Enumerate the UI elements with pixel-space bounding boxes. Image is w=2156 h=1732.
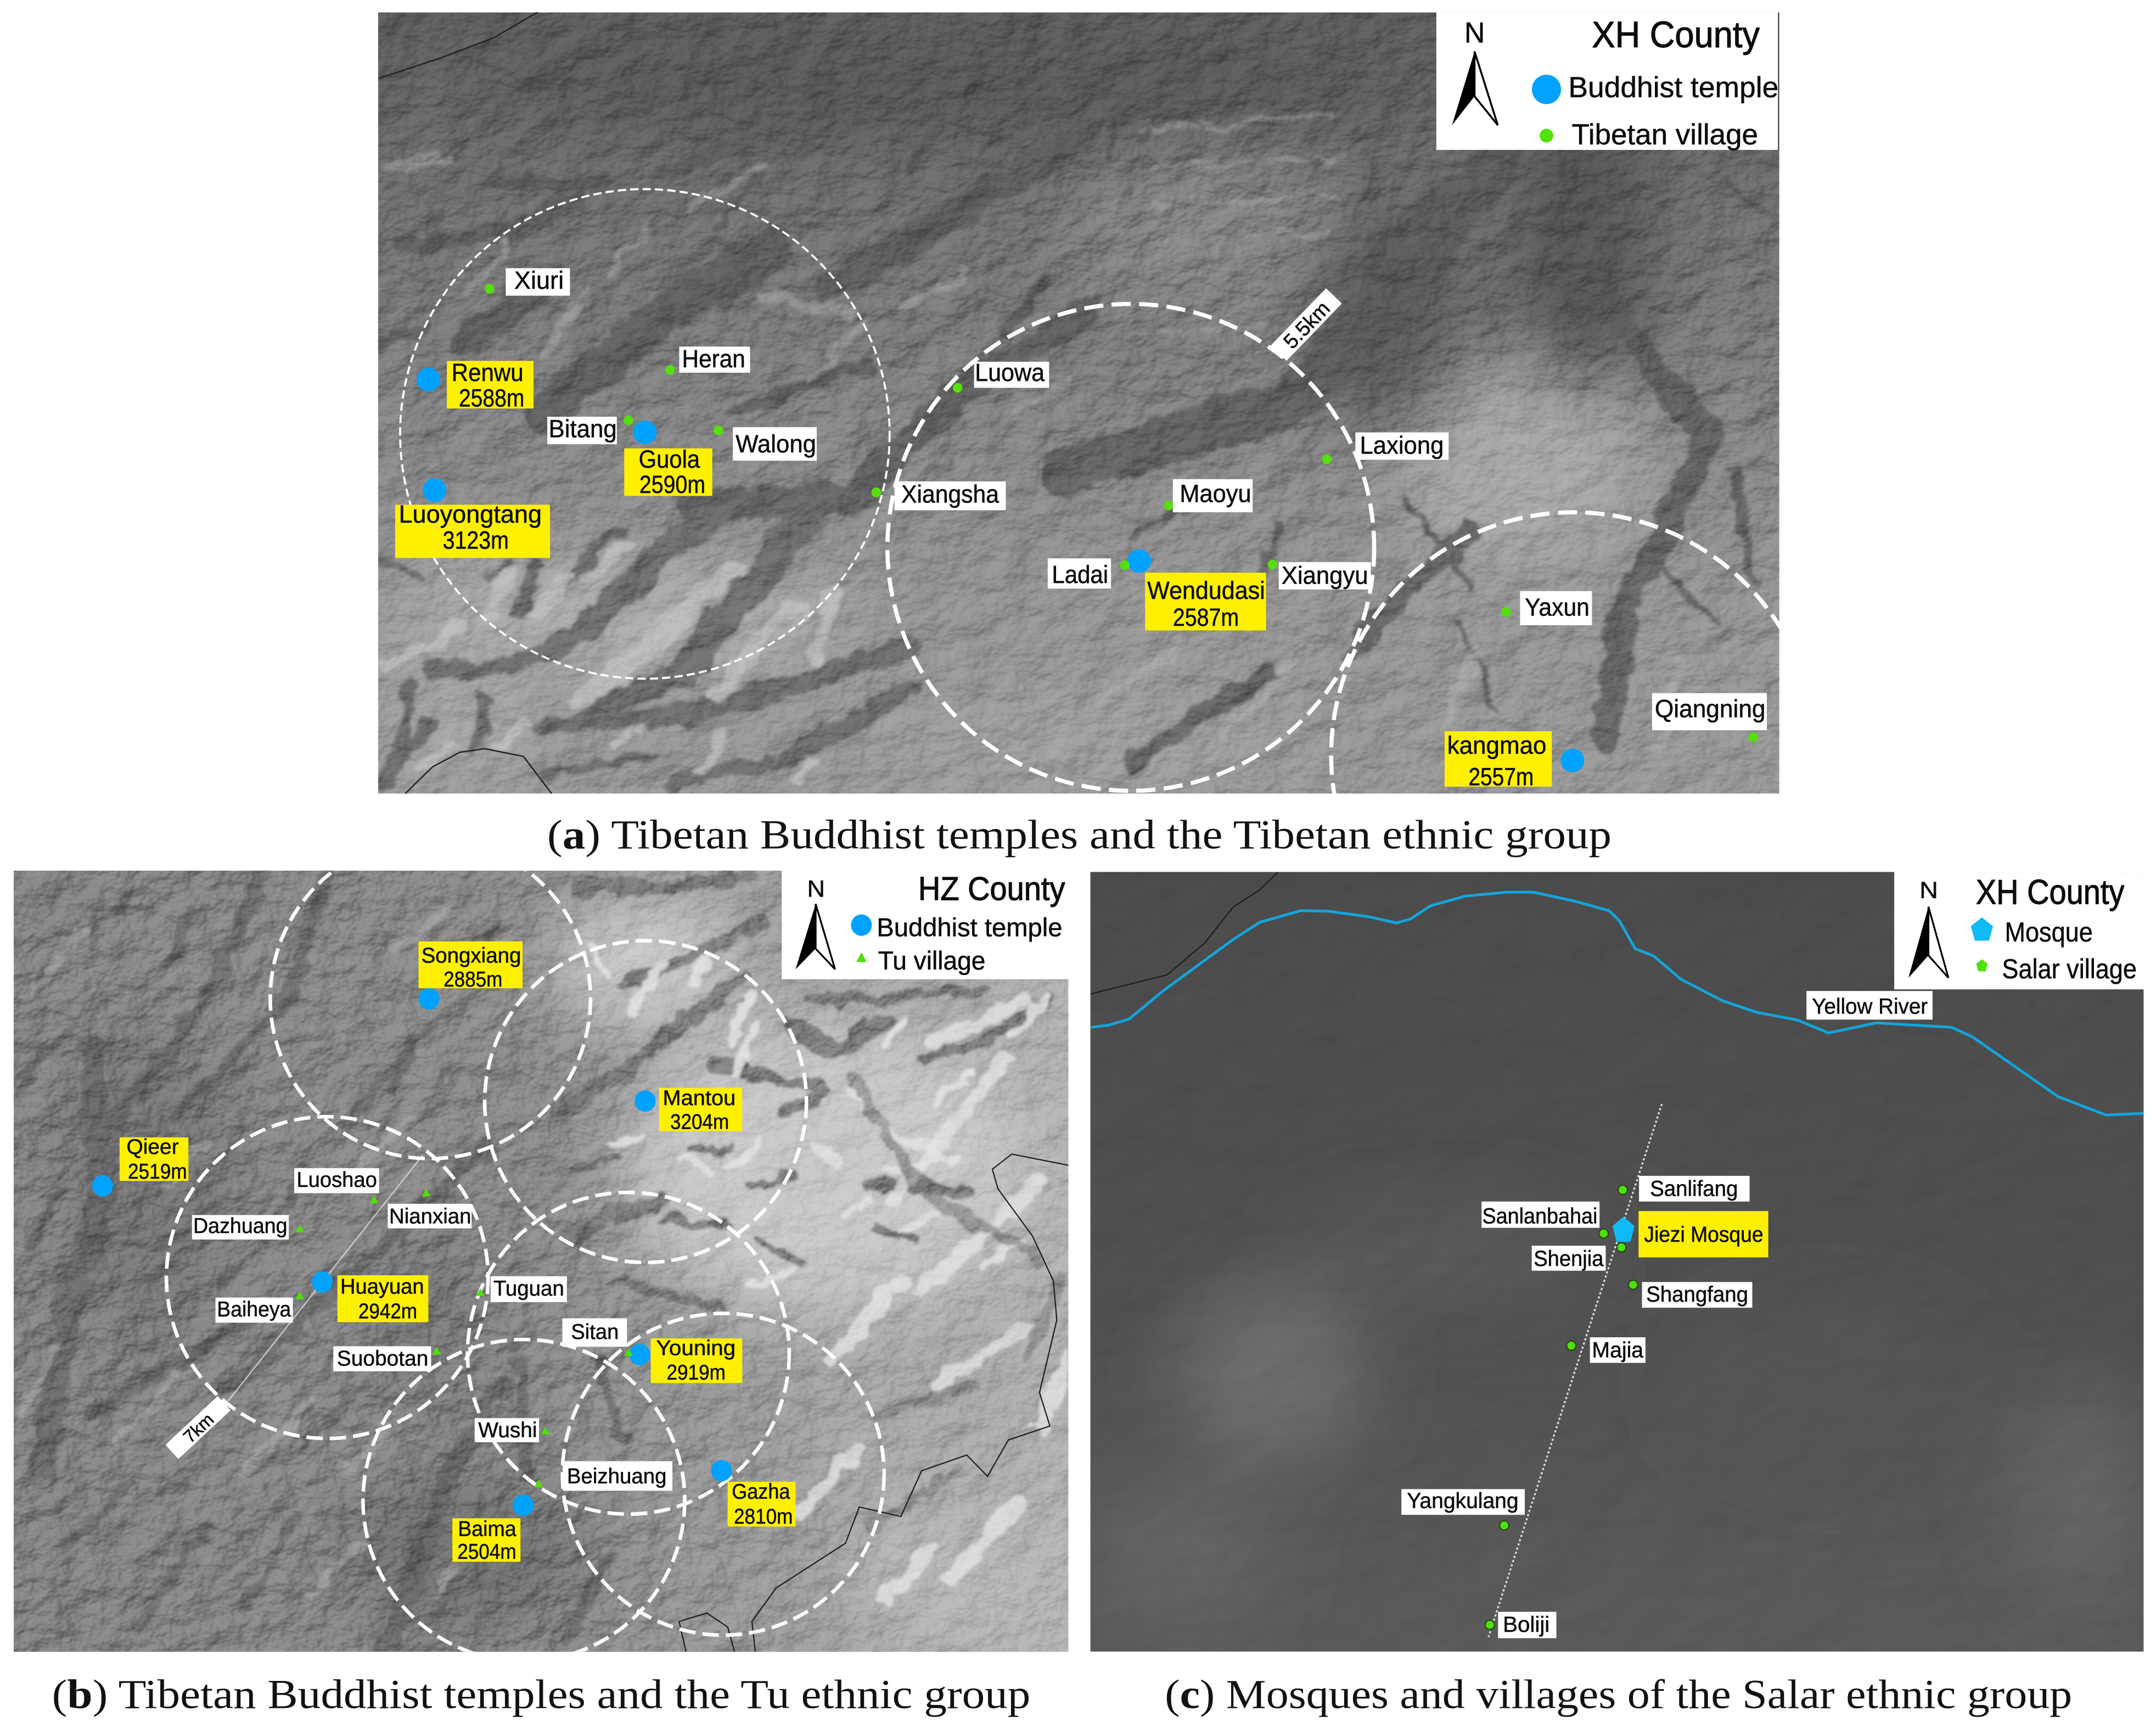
legend (a): Tibetan village: [1571, 119, 1758, 151]
scale label: 7km: 7km: [179, 1409, 218, 1447]
label: Luowa: Luowa: [975, 358, 1045, 386]
buffer circles (b): [166, 838, 884, 1661]
terrain (b): [14, 871, 1073, 1664]
north arrow (c): [1908, 907, 1949, 978]
label: Maoyu: Maoyu: [1180, 479, 1251, 507]
label: Xiuri: Xiuri: [514, 266, 564, 294]
legend (b): [782, 871, 1068, 979]
label: Sanlifang: Sanlifang: [1650, 1176, 1738, 1201]
north arrow (b): [795, 904, 835, 969]
label: Baima 2504m: [452, 1517, 520, 1564]
legend (c): Mosque: [2005, 917, 2093, 948]
temple markers (a): [417, 368, 1584, 772]
label: Youning 2919m: [651, 1337, 742, 1385]
label: Luoshao: Luoshao: [296, 1168, 377, 1192]
label: Wendudasi 2587m: 2587m: [1173, 603, 1239, 631]
label: Beizhuang: Beizhuang: [567, 1465, 666, 1488]
label: Tuguan: Tuguan: [493, 1277, 564, 1301]
legend (b): Buddhist temple: [877, 913, 1062, 943]
scale label: 5.5km: 5.5km: [1279, 296, 1334, 353]
legend (b): HZ County: [918, 871, 1065, 907]
thin scale line (b): [228, 1155, 423, 1401]
legend (c): Salar village: [2002, 954, 2137, 984]
label: Heran: Heran: [682, 345, 745, 373]
label: Luoyongtang 3123m: Luoyongtang: [398, 500, 542, 528]
village markers (c): [1485, 1185, 1638, 1629]
legend (c): [1894, 872, 2143, 989]
north arrow (a): [1452, 52, 1498, 125]
label: Mantou 3204m: [659, 1086, 742, 1134]
label: Sitan: Sitan: [571, 1320, 619, 1344]
label: Yaxun: Yaxun: [1525, 593, 1590, 621]
buffer circle: Guola 5.5km: [400, 189, 890, 679]
label: Renwu 2588m: [447, 358, 534, 412]
scale label: 5.5km: [1271, 288, 1343, 362]
legend (a): N: [1464, 17, 1485, 49]
legend (b): N: [807, 876, 825, 902]
legend (c): XH County: [1976, 873, 2125, 912]
label: Yellow River: Yellow River: [1812, 994, 1928, 1018]
label: Ladai: Ladai: [1052, 560, 1108, 588]
label: Gazha 2810m: Gazha: [732, 1480, 790, 1504]
label: Xiangyu: Xiangyu: [1282, 561, 1368, 589]
panel: map (b) HZ County Tu villages: [14, 838, 1073, 1664]
label: Dazhuang: Dazhuang: [193, 1214, 288, 1238]
label: Laxiong: Laxiong: [1360, 431, 1444, 459]
label: Yangkulang: Yangkulang: [1407, 1489, 1519, 1513]
label: Baiheya: Baiheya: [217, 1298, 291, 1321]
label: Shenjia: Shenjia: [1534, 1247, 1604, 1271]
scale label: 7km: [165, 1396, 232, 1460]
label: Mantou 3204m: Mantou: [662, 1086, 735, 1110]
label: Luoyongtang 3123m: 3123m: [443, 526, 509, 554]
river: Yellow River: [1091, 892, 2144, 1115]
label: Majia: Majia: [1592, 1338, 1644, 1363]
label: Bitang: Bitang: [549, 415, 617, 443]
label: Wushi: Wushi: [478, 1419, 537, 1442]
label: Qieer 2519m: 2519m: [128, 1160, 187, 1184]
county border lines (b): [679, 1154, 1069, 1652]
label: Huayuan 2942m: 2942m: [358, 1299, 417, 1323]
label: kangmao 2557m: [1445, 731, 1552, 791]
label: Shangfang: Shangfang: [1646, 1282, 1748, 1307]
label: Nianxian: Nianxian: [389, 1204, 471, 1228]
label: Qieer 2519m: Qieer: [126, 1135, 179, 1159]
panel: map (a) XH County Tibetan temples: [378, 12, 1779, 794]
label: Jiezi Mosque: [1638, 1211, 1768, 1257]
label: kangmao 2557m: kangmao: [1447, 731, 1546, 759]
label: Renwu 2588m: Renwu: [452, 358, 524, 386]
label: Gazha 2810m: [728, 1480, 795, 1529]
panel: map (c) XH County Salar villages: [1086, 872, 2145, 1652]
village markers (a): [485, 284, 1758, 742]
label: Songxiang 2885m: [419, 941, 523, 991]
dotted axis line: [1489, 1104, 1662, 1637]
label: Luoyongtang 3123m: [395, 500, 550, 558]
legend (c): N: [1919, 877, 1938, 904]
label: Sitan: [563, 1318, 627, 1347]
legend (b): Tu village: [878, 946, 985, 976]
buffer circles: Wendudasi and Kangmao: [885, 302, 1779, 794]
label: Jiezi Mosque: Jiezi Mosque: [1644, 1223, 1764, 1247]
label: Qiangning: Qiangning: [1655, 694, 1766, 722]
label: Guola 2590m: [624, 445, 712, 498]
label: Qieer 2519m: [120, 1135, 188, 1184]
label: Suobotan: Suobotan: [337, 1347, 428, 1371]
label: Wendudasi 2587m: [1145, 573, 1266, 631]
terrain (c): [1086, 872, 2145, 1652]
label: Songxiang 2885m: 2885m: [443, 968, 502, 991]
label: Guola 2590m: Guola: [639, 445, 700, 473]
legend (a): [1436, 13, 1778, 151]
label: Sanlanbahai: Sanlanbahai: [1483, 1204, 1597, 1228]
label: Walong: Walong: [735, 430, 816, 458]
legend (a): XH County: [1592, 15, 1760, 55]
terrain (a): [371, 13, 1779, 793]
temple markers (b): [92, 988, 732, 1516]
label: Baima 2504m: 2504m: [457, 1540, 516, 1564]
label: Youning 2919m: 2919m: [666, 1361, 726, 1385]
county border line (c): [1091, 872, 1278, 994]
label: Guola 2590m: 2590m: [639, 470, 705, 498]
label: Youning 2919m: Youning: [656, 1337, 735, 1360]
label: Huayuan 2942m: Huayuan: [340, 1275, 424, 1299]
label: Boliji: Boliji: [1503, 1612, 1549, 1636]
village markers (b): [295, 1189, 633, 1487]
caption (c): (c) Mosques and villages of the Salar ethnic group: [1165, 1672, 2072, 1717]
label: Baima 2504m: Baima: [458, 1517, 516, 1541]
label: Mantou 3204m: 3204m: [670, 1111, 729, 1134]
label: Renwu 2588m: 2588m: [459, 384, 524, 412]
caption (b): (b) Tibetan Buddhist temples and the Tu ethnic group: [52, 1672, 1030, 1717]
legend (a): Buddhist temple: [1568, 71, 1778, 104]
label: Gazha 2810m: 2810m: [734, 1505, 793, 1529]
label: kangmao 2557m: 2557m: [1468, 763, 1534, 791]
label: Wendudasi 2587m: Wendudasi: [1147, 576, 1265, 604]
mosque marker: Jiezi: [1613, 1217, 1635, 1242]
label: Xiangsha: Xiangsha: [901, 480, 1000, 508]
label: Huayuan 2942m: [338, 1275, 428, 1323]
caption (a): (a) Tibetan Buddhist temples and the Tibetan ethnic group: [547, 812, 1612, 858]
label: Songxiang 2885m: Songxiang: [422, 944, 521, 968]
county border lines (a): [379, 13, 552, 793]
